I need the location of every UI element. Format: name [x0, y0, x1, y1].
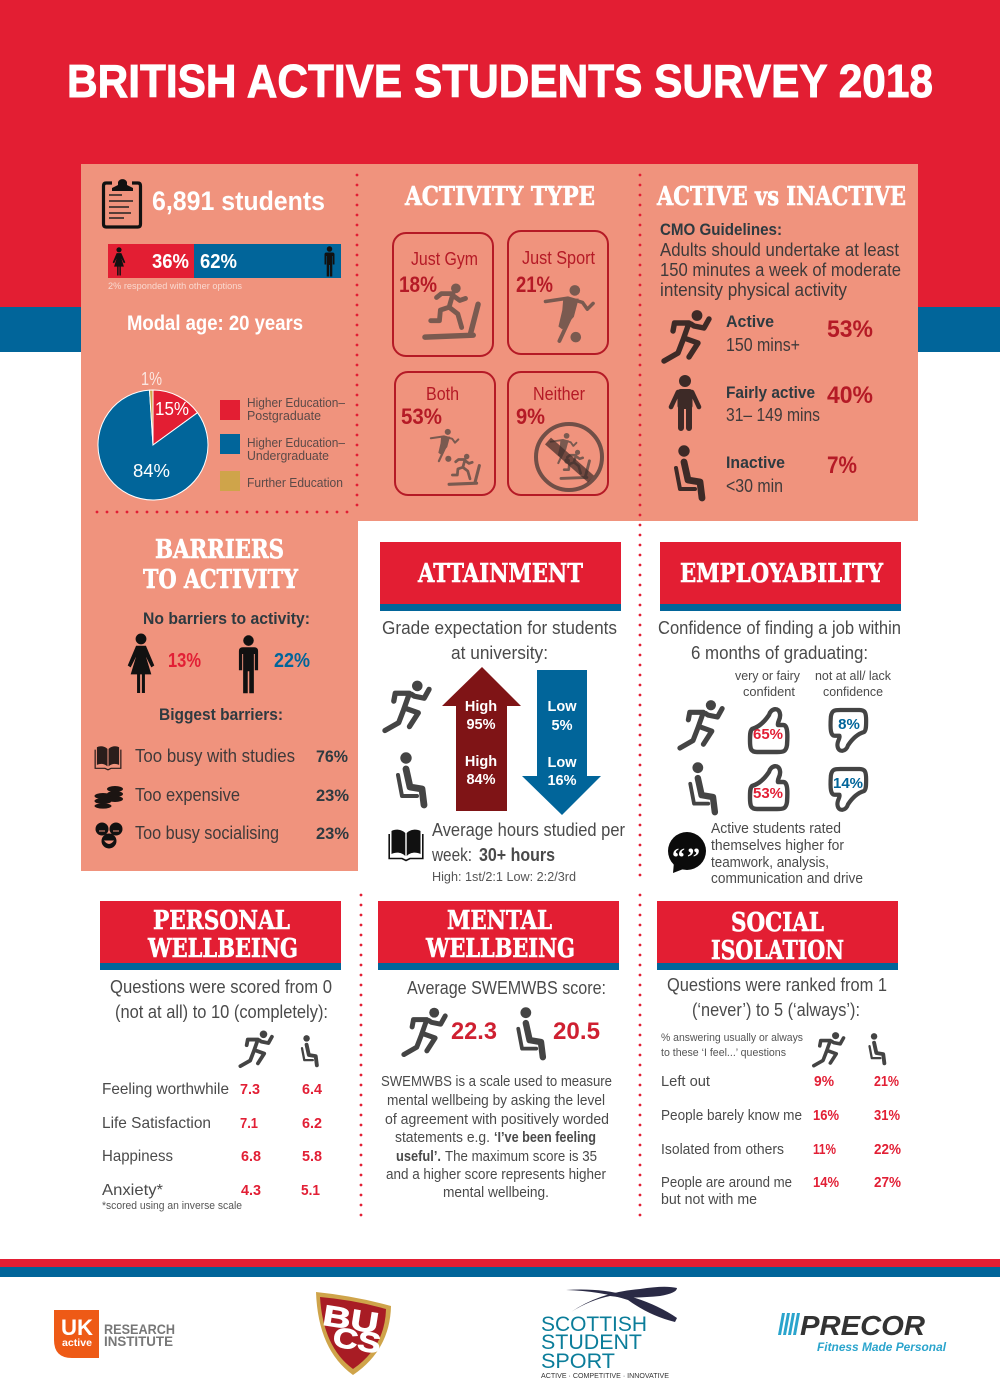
- card: neither: 9%: [516, 404, 545, 429]
- pie legend: Further Education: [247, 475, 343, 490]
- thumb up 65%: [750, 709, 787, 752]
- panel: mental wellbeing: [378, 901, 619, 1201]
- active students note: themselves higher for: [711, 838, 844, 854]
- isolation table: 11%: [813, 1141, 836, 1158]
- icon: clipboard: [104, 179, 140, 227]
- header banner: [657, 901, 898, 970]
- icon: active runner: [385, 681, 429, 731]
- score table: 5.1: [301, 1182, 320, 1199]
- icon: inactive sitter: [690, 762, 715, 812]
- intro: [382, 618, 617, 663]
- man stat: [239, 635, 310, 693]
- average hours: week:: [431, 845, 472, 865]
- intro: Grade expectation for students: [382, 618, 617, 638]
- barrier: studies: 76%: [316, 747, 348, 766]
- pie chart: 15%: [155, 399, 189, 419]
- logo: Precor: Fitness Made Personal: [817, 1340, 947, 1354]
- score table: 7.1: [240, 1115, 258, 1132]
- heading: TO ACTIVITY: [143, 565, 298, 595]
- pie legend: Postgraduate: [247, 408, 321, 423]
- thumb up 65%: 65%: [753, 726, 783, 743]
- SWEMWBS explanation: useful’.: [396, 1149, 441, 1165]
- card: both: Both: [426, 384, 459, 404]
- heading: ACTIVE vs INACTIVE: [656, 182, 906, 212]
- thumb up 53%: 53%: [753, 785, 783, 802]
- logo: UK Active Research Institute: RESEARCH: [104, 1321, 175, 1337]
- thumb down 14%: [831, 769, 866, 810]
- header banner: PERSONAL: [153, 906, 290, 936]
- barrier: studies: [95, 746, 348, 770]
- average hours: Average hours studied per: [432, 820, 625, 840]
- column labels: very or fairy: [735, 668, 800, 683]
- panel: employability: [658, 542, 901, 887]
- intro: at university:: [451, 643, 548, 663]
- arrow: high up: High: [465, 699, 497, 715]
- isolation table: 27%: [874, 1174, 901, 1191]
- inactive score: [518, 1007, 600, 1057]
- logo: UK Active Research Institute: UK: [61, 1315, 93, 1340]
- score table: 7.3: [240, 1081, 260, 1098]
- intro: 6 months of graduating:: [691, 643, 868, 663]
- salmon panel: [81, 164, 918, 871]
- heading: [143, 535, 298, 595]
- student count: 6,891 students: [152, 186, 325, 216]
- arrow: high up: 95%: [466, 717, 496, 733]
- panel: attainment: [380, 542, 625, 884]
- card: just gym: 18%: [399, 272, 437, 297]
- table note: % answering usually or always: [661, 1032, 803, 1044]
- logo: Precor: PRECOR: [800, 1310, 926, 1341]
- barrier: socialising: [96, 822, 349, 848]
- arrow: low down: 5%: [552, 718, 573, 734]
- CMO guidelines: 150 minutes a week of moderate: [660, 260, 901, 280]
- arrow: high up: 84%: [466, 772, 496, 788]
- intro: (not at all) to 10 (completely):: [115, 1002, 328, 1022]
- arrow: low down: [522, 670, 601, 815]
- active row: Active: [726, 312, 774, 331]
- pie legend: Higher Education–: [247, 395, 346, 410]
- woman stat: [128, 633, 201, 693]
- heading: BARRIERS: [155, 535, 284, 565]
- pie chart: 1%: [141, 369, 162, 389]
- barrier: expensive: Too expensive: [135, 785, 240, 805]
- SWEMWBS explanation: The maximum score is 35: [445, 1149, 597, 1165]
- average hours: 30+ hours: [479, 845, 555, 865]
- intro: [658, 618, 901, 663]
- gender bar: 36%: [152, 251, 189, 273]
- icon: inactive sitter: [302, 1035, 317, 1065]
- active score: [404, 1008, 497, 1055]
- SWEMWBS explanation: and a higher score represents higher: [386, 1167, 606, 1183]
- inactive row: Inactive: [726, 453, 785, 472]
- column labels: not at all/ lack: [815, 668, 891, 683]
- CMO guidelines: Adults should undertake at least: [660, 240, 899, 260]
- card: just sport: 21%: [516, 272, 553, 297]
- icon: active runner: [680, 700, 722, 748]
- panel: active vs inactive: [656, 182, 906, 498]
- fairly active row: 40%: [827, 382, 873, 409]
- isolation table: 14%: [813, 1174, 839, 1191]
- pie legend: Undergraduate: [247, 448, 329, 463]
- logo: UK Active Research Institute: active: [62, 1338, 92, 1349]
- pie chart: 84%: [133, 461, 170, 481]
- CMO guidelines: CMO Guidelines:: [660, 220, 782, 239]
- column labels: [735, 668, 891, 699]
- active row: [664, 310, 873, 361]
- score table: 6.8: [241, 1148, 261, 1165]
- pie legend: Higher Education–: [247, 435, 346, 450]
- isolation table: People barely know me: [661, 1107, 802, 1124]
- score table: 5.8: [302, 1148, 322, 1165]
- header banner: [380, 542, 621, 611]
- intro: (‘never’) to 5 (‘always’):: [692, 1000, 860, 1020]
- header banner: SOCIAL: [731, 908, 824, 938]
- red header band: [0, 0, 1000, 307]
- SWEMWBS explanation: mental wellbeing.: [443, 1185, 549, 1201]
- logo: UK Active Research Institute: INSTITUTE: [104, 1333, 173, 1349]
- score table: Life Satisfaction: [102, 1115, 211, 1132]
- panel: respondents: [98, 179, 346, 500]
- CMO guidelines: [660, 220, 901, 300]
- barrier: expensive: [94, 785, 349, 809]
- barrier: expensive: 23%: [316, 786, 349, 805]
- header banner: WELLBEING: [425, 934, 575, 964]
- intro: Questions were scored from 0: [110, 977, 332, 997]
- intro: [110, 977, 332, 1022]
- inactive score: 20.5: [553, 1018, 600, 1045]
- SWEMWBS explanation: ‘I’ve been feeling: [494, 1130, 596, 1146]
- header banner: WELLBEING: [147, 934, 298, 964]
- no barriers subheading: No barriers to activity:: [143, 609, 310, 628]
- arrow: low down: Low: [548, 755, 577, 771]
- panel: activity type: [393, 182, 608, 495]
- panel: personal wellbeing: [100, 901, 341, 1212]
- active students note: communication and drive: [711, 871, 863, 887]
- logo: BUCS: CS: [331, 1321, 383, 1359]
- isolation table: 9%: [814, 1073, 834, 1090]
- thumb down 14%: 14%: [833, 775, 863, 792]
- arrow: low down: Low: [548, 699, 577, 715]
- card: just gym: Just Gym: [411, 249, 478, 269]
- icon: book: [389, 830, 423, 860]
- logo: Scottish Student Sport: SCOTTISH: [541, 1313, 647, 1336]
- blue band: [0, 307, 1000, 352]
- header banner: ISOLATION: [711, 936, 844, 966]
- header banner: [378, 901, 619, 970]
- arrow: low down: 16%: [547, 773, 577, 789]
- table note: [661, 1032, 803, 1059]
- SWEMWBS explanation: statements e.g.: [395, 1130, 490, 1146]
- logo: Scottish Student Sport: SPORT: [541, 1350, 615, 1373]
- footer stripes: [0, 1259, 1000, 1277]
- logo: BUCS: [316, 1292, 391, 1375]
- logo: BUCS: BU: [321, 1300, 381, 1340]
- panel: barriers: [94, 535, 349, 848]
- barrier: socialising: 23%: [316, 824, 349, 843]
- thumb down 8%: 8%: [838, 716, 860, 733]
- title: BRITISH ACTIVE STUDENTS SURVEY 2018: [67, 55, 933, 107]
- modal age: Modal age: 20 years: [127, 312, 303, 335]
- fairly active row: 31– 149 mins: [726, 405, 820, 425]
- icon: active runner: [240, 1031, 272, 1066]
- thumb down 8%: [831, 710, 866, 751]
- gender bar: [108, 244, 341, 278]
- icon: inactive sitter: [398, 752, 424, 805]
- SWEMWBS explanation: SWEMWBS is a scale used to measure: [381, 1074, 612, 1090]
- header banner: MENTAL: [447, 906, 552, 936]
- score table: 6.2: [302, 1115, 322, 1132]
- thumb up 53%: [750, 766, 787, 809]
- column labels: confidence: [823, 684, 883, 699]
- barrier: socialising: Too busy socialising: [135, 823, 279, 843]
- woman stat: 13%: [168, 650, 201, 672]
- card: both: [395, 372, 495, 495]
- header banner: [660, 542, 901, 611]
- isolation table: [661, 1073, 901, 1208]
- barrier: studies: Too busy with studies: [135, 746, 295, 766]
- active students note: [711, 821, 863, 887]
- intro: [667, 975, 887, 1020]
- active students note: Active students rated: [711, 821, 841, 837]
- icon: speech bubble: [668, 832, 706, 873]
- isolation table: but not with me: [661, 1191, 757, 1208]
- panel: social isolation: [657, 901, 901, 1208]
- fairly active row: [671, 375, 873, 428]
- pie legend: [220, 395, 346, 491]
- score table: Anxiety*: [102, 1182, 163, 1199]
- active score: 22.3: [451, 1018, 497, 1045]
- card: both: 53%: [401, 404, 442, 429]
- isolation table: 22%: [874, 1141, 901, 1158]
- logo: Scottish Student Sport: STUDENT: [541, 1331, 642, 1354]
- card: neither: [508, 372, 608, 495]
- logo: UK Active Research Institute: [54, 1310, 175, 1358]
- heading: ACTIVITY TYPE: [404, 182, 595, 212]
- logo: Scottish Student Sport: ACTIVE · COMPETITIVE · INNOVATIVE: [541, 1373, 669, 1380]
- column labels: confident: [743, 684, 795, 699]
- header banner: EMPLOYABILITY: [680, 559, 883, 589]
- CMO guidelines: intensity physical activity: [660, 280, 847, 300]
- active row: 53%: [827, 316, 873, 343]
- SWEMWBS explanation: of agreement with positively worded: [385, 1112, 609, 1128]
- icon: active runner: [814, 1032, 844, 1066]
- average hours: High: 1st/2:1 Low: 2:2/3rd: [432, 870, 576, 884]
- fairly active row: Fairly active: [726, 383, 815, 402]
- intro: Confidence of finding a job within: [658, 618, 901, 638]
- isolation table: People are around me: [661, 1174, 792, 1191]
- pie chart: [98, 369, 208, 500]
- isolation table: Left out: [661, 1073, 711, 1090]
- header banner: ATTAINMENT: [417, 559, 584, 589]
- intro: Average SWEMWBS score:: [407, 978, 606, 998]
- logo: Precor: [778, 1310, 947, 1354]
- average hours: [431, 820, 625, 884]
- card: just gym: [393, 233, 493, 356]
- isolation table: 16%: [813, 1107, 839, 1124]
- card: just sport: Just Sport: [522, 248, 595, 268]
- biggest barriers subheading: Biggest barriers:: [159, 705, 283, 724]
- score table: Feeling worthwhile: [102, 1081, 229, 1098]
- footnote: *scored using an inverse scale: [102, 1200, 242, 1212]
- arrow: high up: High: [465, 754, 497, 770]
- icon: speech bubble: “”: [672, 843, 702, 872]
- gender bar: 62%: [200, 251, 237, 273]
- active students note: teamwork, analysis,: [711, 855, 829, 871]
- card: just sport: [508, 231, 608, 354]
- isolation table: Isolated from others: [661, 1141, 784, 1158]
- man stat: 22%: [274, 650, 310, 672]
- icon: inactive sitter: [870, 1033, 884, 1063]
- isolation table: 21%: [874, 1073, 899, 1090]
- SWEMWBS explanation: mental wellbeing by asking the level: [387, 1093, 605, 1109]
- isolation table: 31%: [874, 1107, 900, 1124]
- SWEMWBS explanation: [381, 1074, 612, 1201]
- inactive row: 7%: [827, 452, 857, 479]
- gender footnote: 2% responded with other options: [108, 281, 242, 292]
- intro: Questions were ranked from 1: [667, 975, 887, 995]
- card: neither: Neither: [533, 384, 585, 404]
- inactive row: [676, 445, 857, 498]
- score table: [102, 1081, 323, 1199]
- score table: Happiness: [102, 1148, 173, 1165]
- logo: Scottish Student Sport: [541, 1287, 677, 1380]
- score table: 4.3: [241, 1182, 261, 1199]
- arrow: high up: [442, 667, 521, 811]
- table note: to these ‘I feel...’ questions: [661, 1047, 786, 1059]
- header banner: [100, 901, 341, 970]
- inactive row: <30 min: [726, 476, 783, 496]
- active row: 150 mins+: [726, 335, 800, 355]
- score table: 6.4: [302, 1081, 323, 1098]
